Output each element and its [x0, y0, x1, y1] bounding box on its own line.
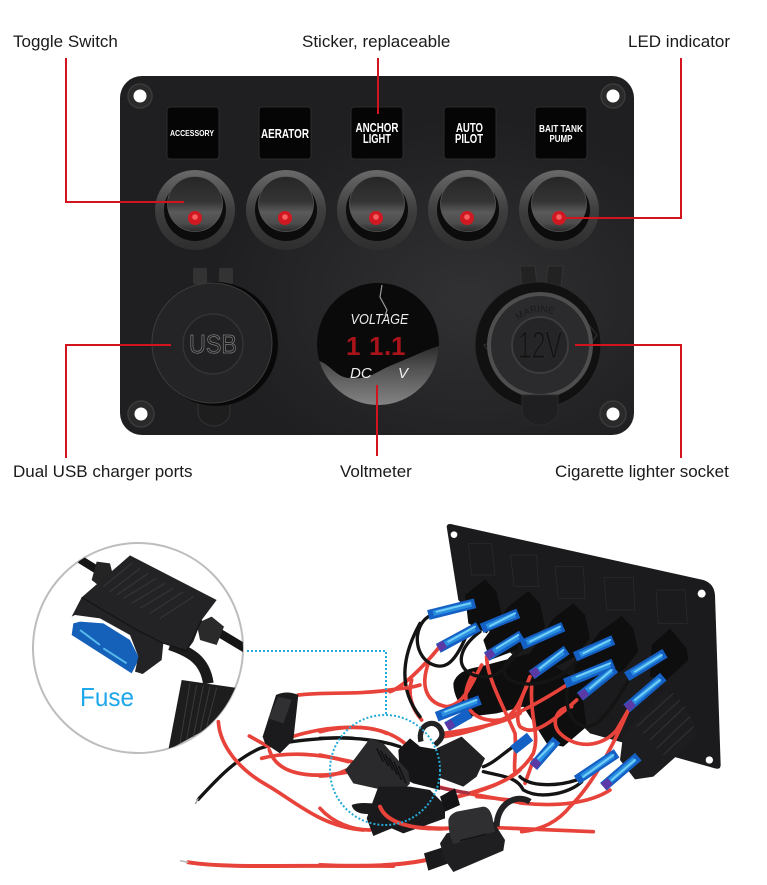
- rocker switch 1: [155, 170, 235, 250]
- callout: voltmeter: Voltmeter: [340, 462, 412, 481]
- magnified fuse holder: [72, 555, 247, 750]
- cigarette lighter socket: [476, 266, 600, 405]
- panel: front switch panel: [120, 76, 634, 435]
- cigarette lighter socket: 12V: [518, 325, 562, 367]
- voltmeter: [315, 283, 442, 410]
- fuse holder: ribbed left: [345, 738, 440, 798]
- sticker: auto pilot: AUTO: [456, 120, 483, 135]
- sticker: anchor light: ANCHOR: [356, 120, 399, 135]
- red digital readout: 1: [369, 331, 383, 361]
- loose wires: [180, 685, 420, 866]
- threaded socket barrel: [620, 690, 698, 779]
- callout: dual USB charger ports: [13, 345, 193, 481]
- central cluster of inline fuses: [320, 713, 530, 872]
- sticker: accessory: ACCESSORY: [170, 129, 215, 138]
- loop strap: [420, 723, 442, 745]
- callout: toggle switch: [13, 32, 184, 202]
- USB charger socket: USB: [189, 329, 237, 359]
- red digital readout: .: [384, 331, 391, 361]
- fuse holder: bottom: [424, 799, 530, 872]
- USB charger socket: [152, 268, 278, 426]
- fuse holder: right: [437, 737, 485, 787]
- callout: LED indicator: LED indicator: [628, 32, 730, 51]
- callout: dual USB charger ports: Dual USB charger ports: [13, 462, 193, 481]
- callout: LED indicator: [563, 32, 730, 218]
- voltmeter: DC: [350, 365, 372, 382]
- sticker: bait tank pump: [535, 107, 587, 159]
- rocker switch 2: [246, 170, 326, 250]
- cigarette lighter socket: MARINE: [516, 306, 554, 320]
- small fuse holder: [263, 692, 298, 753]
- mounting screw holes: [128, 84, 626, 427]
- callout: fuse magnified: [33, 543, 247, 753]
- rear plate: [447, 524, 721, 769]
- rocker switch 3: [337, 170, 417, 250]
- red digital readout: 1: [391, 331, 405, 361]
- sticker: anchor light: LIGHT: [363, 131, 391, 146]
- voltmeter: VOLTAGE: [350, 311, 409, 328]
- sticker: bait tank pump: PUMP: [550, 134, 573, 145]
- rocker switch 4: [428, 170, 508, 250]
- label: Fuse: Fuse: [80, 682, 134, 712]
- sticker: bait tank pump: BAIT TANK: [539, 124, 584, 135]
- callout: toggle switch: Toggle Switch: [13, 32, 118, 51]
- callout: voltmeter: [340, 385, 412, 481]
- voltmeter: V: [398, 365, 410, 382]
- dotted connector: fuse zoom: [247, 651, 440, 825]
- sticker: auto pilot: PILOT: [455, 131, 483, 146]
- sticker: anchor light: [351, 107, 403, 159]
- callout: cigarette lighter socket: [555, 345, 729, 481]
- black jumper wires: [405, 617, 630, 795]
- wires around fuses: [320, 713, 520, 866]
- fuse holder: lower with loop: [352, 787, 460, 836]
- switch housings: [453, 579, 688, 747]
- sticker: aerator: AERATOR: [261, 126, 309, 141]
- blue crimp terminals: [428, 603, 665, 787]
- callout: cigarette lighter socket: Cigarette lighter socket: [555, 462, 729, 481]
- rear view: panel with wiring: [390, 524, 721, 832]
- red wires: [390, 648, 628, 832]
- sticker: aerator: [259, 107, 311, 159]
- left wires and small fuse holder: [180, 685, 420, 866]
- callout: sticker: Sticker, replaceable: [302, 32, 450, 51]
- rocker switch 5: [519, 170, 599, 250]
- sticker: auto pilot: [444, 107, 496, 159]
- red digital readout: 1: [346, 331, 360, 361]
- sticker: accessory: [167, 107, 219, 159]
